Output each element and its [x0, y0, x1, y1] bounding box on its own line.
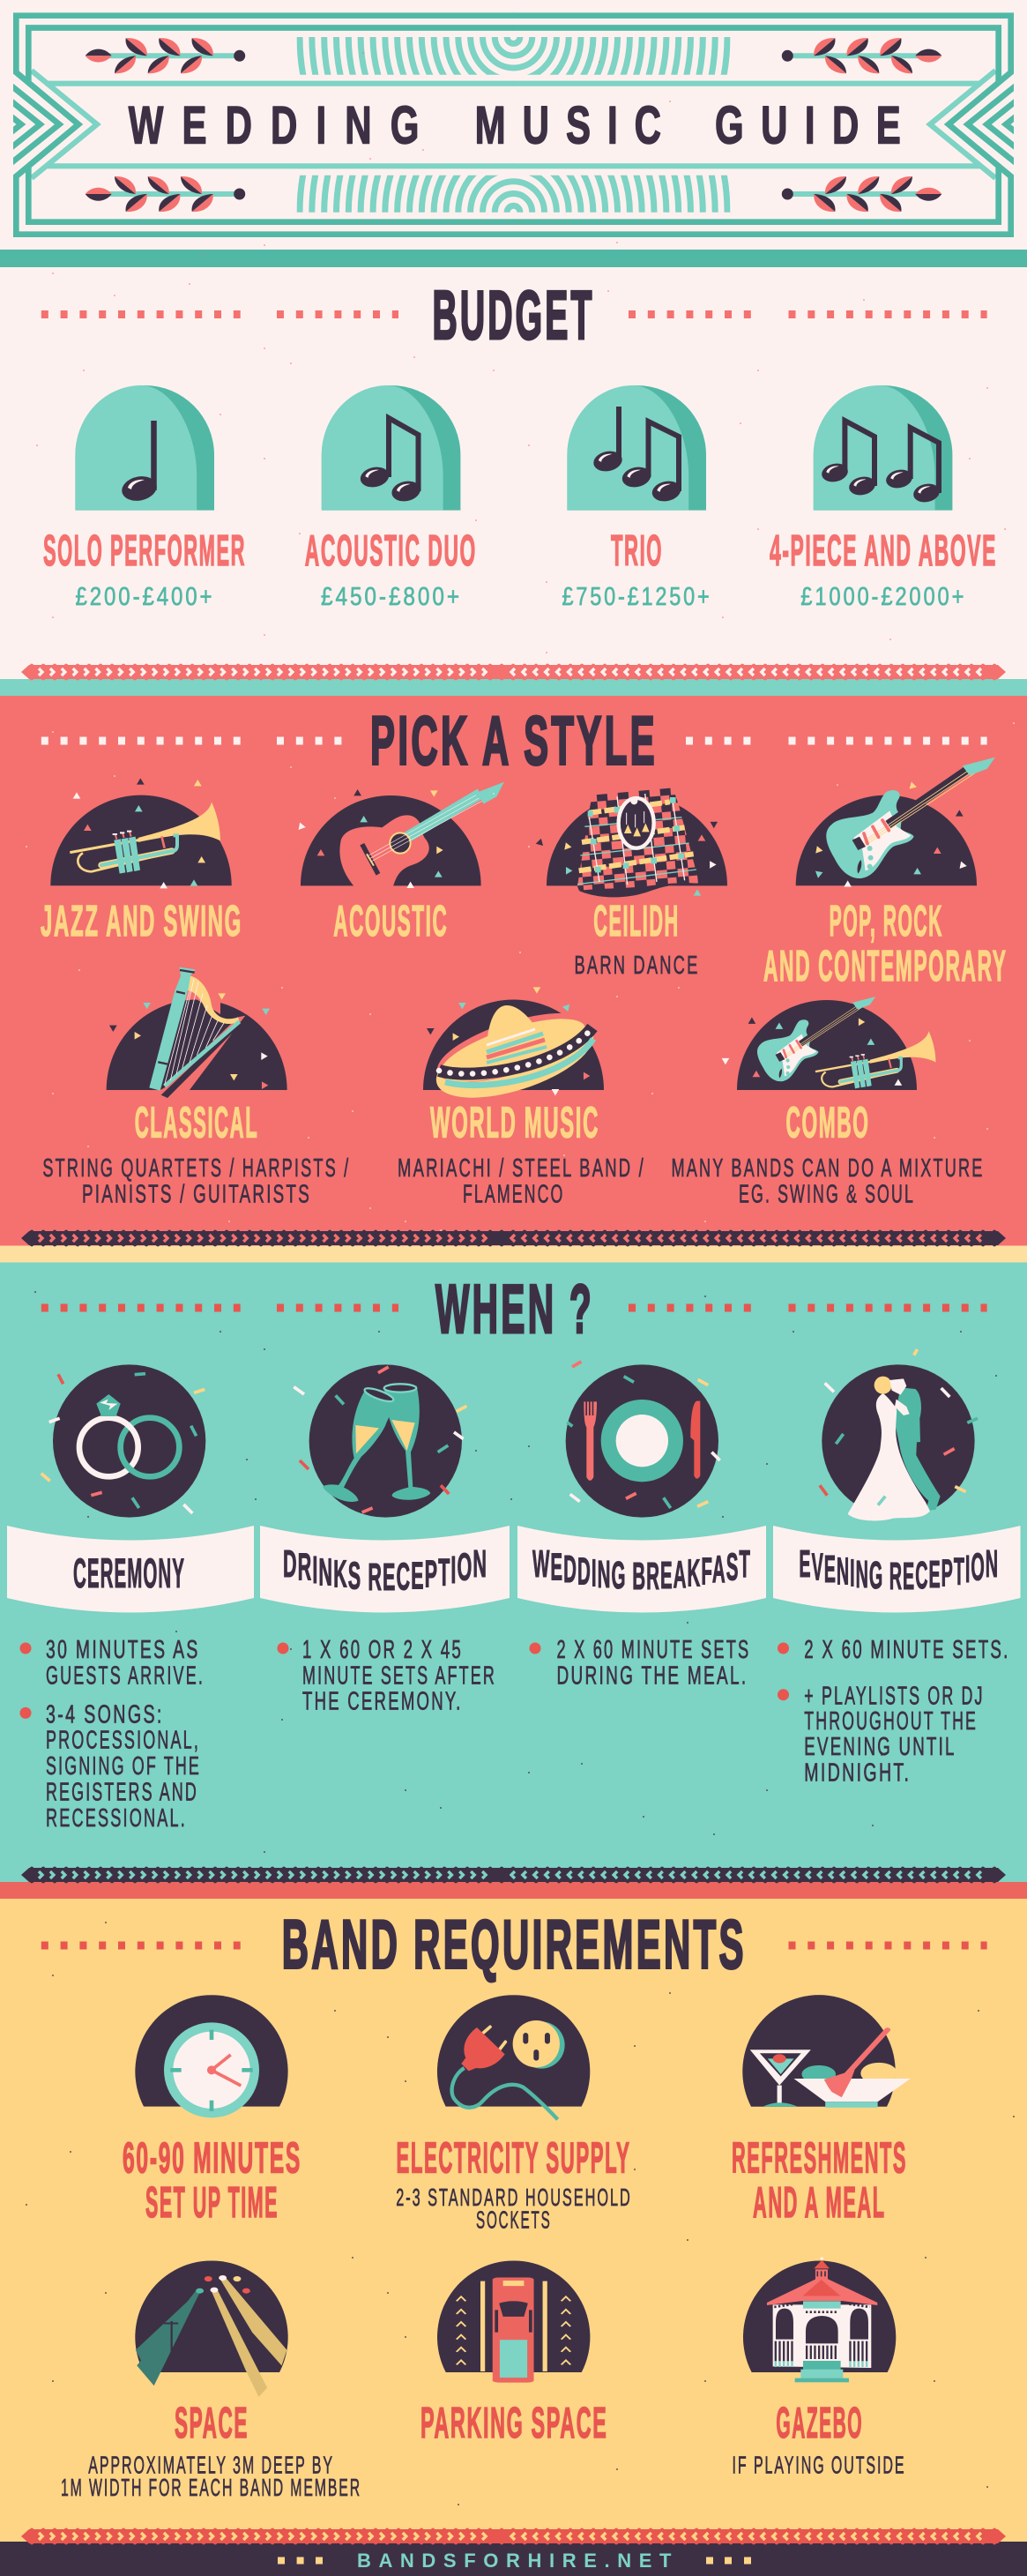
title: WEDDING: [129, 95, 419, 154]
title: MUSIC: [475, 95, 661, 154]
panel: pick a style: [0, 696, 1027, 1246]
banner: drinks reception: DRINKS RECEPTION: [283, 1542, 487, 1599]
left frame and chevrons: [9, 16, 514, 235]
footer bar: [0, 2542, 1027, 2576]
chevron band: dark on pink: [21, 1231, 1006, 1245]
icon: gazebo: [743, 2257, 896, 2382]
text: world music description: MARIACHI / STEEL BAND /: [398, 1154, 645, 1183]
icon: combo guitar and trumpet: [722, 997, 935, 1090]
text: space note: APPROXIMATELY 3M DEEP BY: [88, 2452, 334, 2479]
label: refreshments: [732, 2134, 907, 2227]
icon: jazz trumpet: [50, 778, 232, 888]
icon: dancing couple: [820, 1349, 978, 1520]
icon: cocktail and meal: [742, 1995, 911, 2108]
leaf sprig bottom right: [782, 176, 941, 212]
list: drinks reception details: MINUTE SETS AFTER: [302, 1661, 496, 1690]
panel: band requirements: SPACE: [175, 2400, 249, 2447]
list: ceremony details: REGISTERS AND: [46, 1778, 198, 1806]
title: [129, 95, 901, 154]
text: combo description: EG. SWING & SOUL: [739, 1180, 915, 1208]
icon: plug and socket: [437, 1995, 590, 2119]
header banner: [12, 12, 1014, 237]
list: wedding breakfast details: 2 X 60 MINUTE SETS: [557, 1636, 750, 1664]
text: world music description: FLAMENCO: [463, 1180, 564, 1208]
banner: ceremony: CEREMONY: [73, 1549, 185, 1596]
leaf sprig top left: [86, 38, 245, 73]
icon: electric guitar: [796, 758, 995, 887]
list: drinks reception details: THE CEREMONY.: [302, 1688, 462, 1716]
list: ceremony details: GUESTS ARRIVE.: [46, 1661, 205, 1690]
arch icon: trio notes: [567, 385, 706, 511]
list: ceremony details: PROCESSIONAL,: [46, 1727, 200, 1755]
icon: plate and cutlery: [566, 1362, 720, 1518]
pale yellow divider: [0, 1246, 1027, 1263]
panel: budget: SOLO PERFORMER: [43, 527, 246, 575]
text: classical description: STRING QUARTETS / HARPISTS /: [42, 1154, 350, 1183]
panel: band requirements: ELECTRICITY SUPPLY: [397, 2134, 631, 2182]
text: sockets note: SOCKETS: [476, 2206, 552, 2234]
list: evening reception details: [778, 1636, 1010, 1787]
list: drinks reception details: 1 X 60 OR 2 X 45: [302, 1636, 463, 1664]
banner: wedding breakfast: [517, 1526, 766, 1612]
panel: band requirements: [0, 1899, 1027, 2542]
banner: evening reception: EVENING RECEPTION: [799, 1542, 999, 1598]
top striped arches: [296, 37, 730, 75]
list: ceremony details: SIGNING OF THE: [46, 1752, 201, 1781]
arch icon: four notes: [814, 385, 952, 511]
arch icon: solo note: [75, 385, 214, 511]
list: ceremony details: [19, 1636, 205, 1833]
price: four piece: £1000-£2000+: [800, 583, 966, 611]
price: trio: £750-£1250+: [562, 583, 712, 611]
chevron band: dark on teal: [21, 1868, 1006, 1882]
bottom striped arches: [296, 175, 730, 213]
list: ceremony details: 3-4 SONGS:: [46, 1700, 164, 1729]
icon: ceilidh kilt: [536, 788, 727, 897]
price: duo: £450-£800+: [321, 583, 462, 611]
icon: harp: [107, 967, 287, 1098]
right frame and chevrons: [513, 16, 1018, 235]
price: solo: £200-£400+: [76, 583, 215, 611]
list: ceremony details: RECESSIONAL.: [46, 1804, 187, 1833]
text: world music description: [398, 1154, 645, 1208]
panel: pick a style: CEILIDH: [593, 898, 680, 945]
text: sockets note: 2-3 STANDARD HOUSEHOLD: [396, 2184, 632, 2211]
panel: budget: ACOUSTIC DUO: [305, 527, 477, 575]
list: ceremony details: 30 MINUTES AS: [46, 1636, 200, 1664]
teal divider band: [0, 250, 1027, 267]
icon: stage spotlights: [135, 2260, 288, 2397]
label: set up time: SET UP TIME: [145, 2179, 279, 2227]
leaf sprig bottom left: [86, 176, 245, 212]
text: classical description: PIANISTS / GUITARISTS: [82, 1180, 311, 1208]
panel: pick a style: JAZZ AND SWING: [41, 898, 242, 945]
panel: band requirements: GAZEBO: [776, 2400, 863, 2447]
list: wedding breakfast details: [529, 1636, 750, 1690]
panel: pick a style: ACOUSTIC: [333, 898, 448, 945]
banner: drinks reception: [260, 1526, 510, 1612]
label: set up time: 60-90 MINUTES: [123, 2134, 301, 2182]
panel: when: [0, 1263, 1027, 1882]
text: gazebo note: IF PLAYING OUTSIDE: [733, 2452, 905, 2479]
icon: acoustic guitar: [296, 782, 504, 888]
icon: parked van: [437, 2260, 590, 2383]
red divider: [0, 1882, 1027, 1899]
banner: evening reception: [773, 1526, 1021, 1612]
text: space note: 1M WIDTH FOR EACH BAND MEMBER: [61, 2474, 361, 2501]
list: evening reception details: MIDNIGHT.: [804, 1758, 911, 1787]
heading: budget: BUDGET: [432, 276, 594, 354]
panel: budget: [0, 267, 1027, 679]
title: GUIDE: [715, 95, 901, 154]
panel: pick a style: COMBO: [786, 1099, 869, 1146]
panel: pick a style: WORLD MUSIC: [430, 1099, 599, 1146]
heading: when: WHEN ?: [435, 1270, 594, 1348]
list: wedding breakfast details: DURING THE MEAL.: [557, 1661, 748, 1690]
text: space note: [61, 2452, 361, 2501]
icon: sombrero: [423, 987, 604, 1114]
banner: ceremony: [7, 1526, 254, 1612]
panel: band requirements: PARKING SPACE: [420, 2400, 607, 2447]
text: sockets note: [396, 2184, 632, 2234]
icon: clock: [135, 1995, 288, 2117]
arch icon: duo notes: [322, 385, 460, 511]
light teal divider: [0, 679, 1027, 696]
footer squares left: [278, 2557, 323, 2565]
heading: pick a style: PICK A STYLE: [370, 702, 658, 780]
footer squares right: [706, 2557, 751, 2565]
chevron band: pink: [21, 665, 1006, 679]
text: combo description: [672, 1154, 984, 1208]
footer url: BANDSFORHIRE.NET: [357, 2550, 672, 2572]
text: classical description: [42, 1154, 350, 1208]
panel: pick a style: CLASSICAL: [135, 1099, 258, 1146]
leaf sprig top right: [782, 38, 941, 73]
panel: budget: TRIO: [611, 527, 663, 575]
list: drinks reception details: [277, 1636, 496, 1716]
text: barn dance: BARN DANCE: [575, 952, 700, 980]
icon: wedding rings: [41, 1364, 205, 1518]
chevron band: red: [21, 2529, 1006, 2543]
banner: wedding breakfast: WEDDING BREAKFAST: [532, 1542, 751, 1598]
label: set up time: [123, 2134, 301, 2227]
icon: champagne glasses: [294, 1364, 466, 1518]
